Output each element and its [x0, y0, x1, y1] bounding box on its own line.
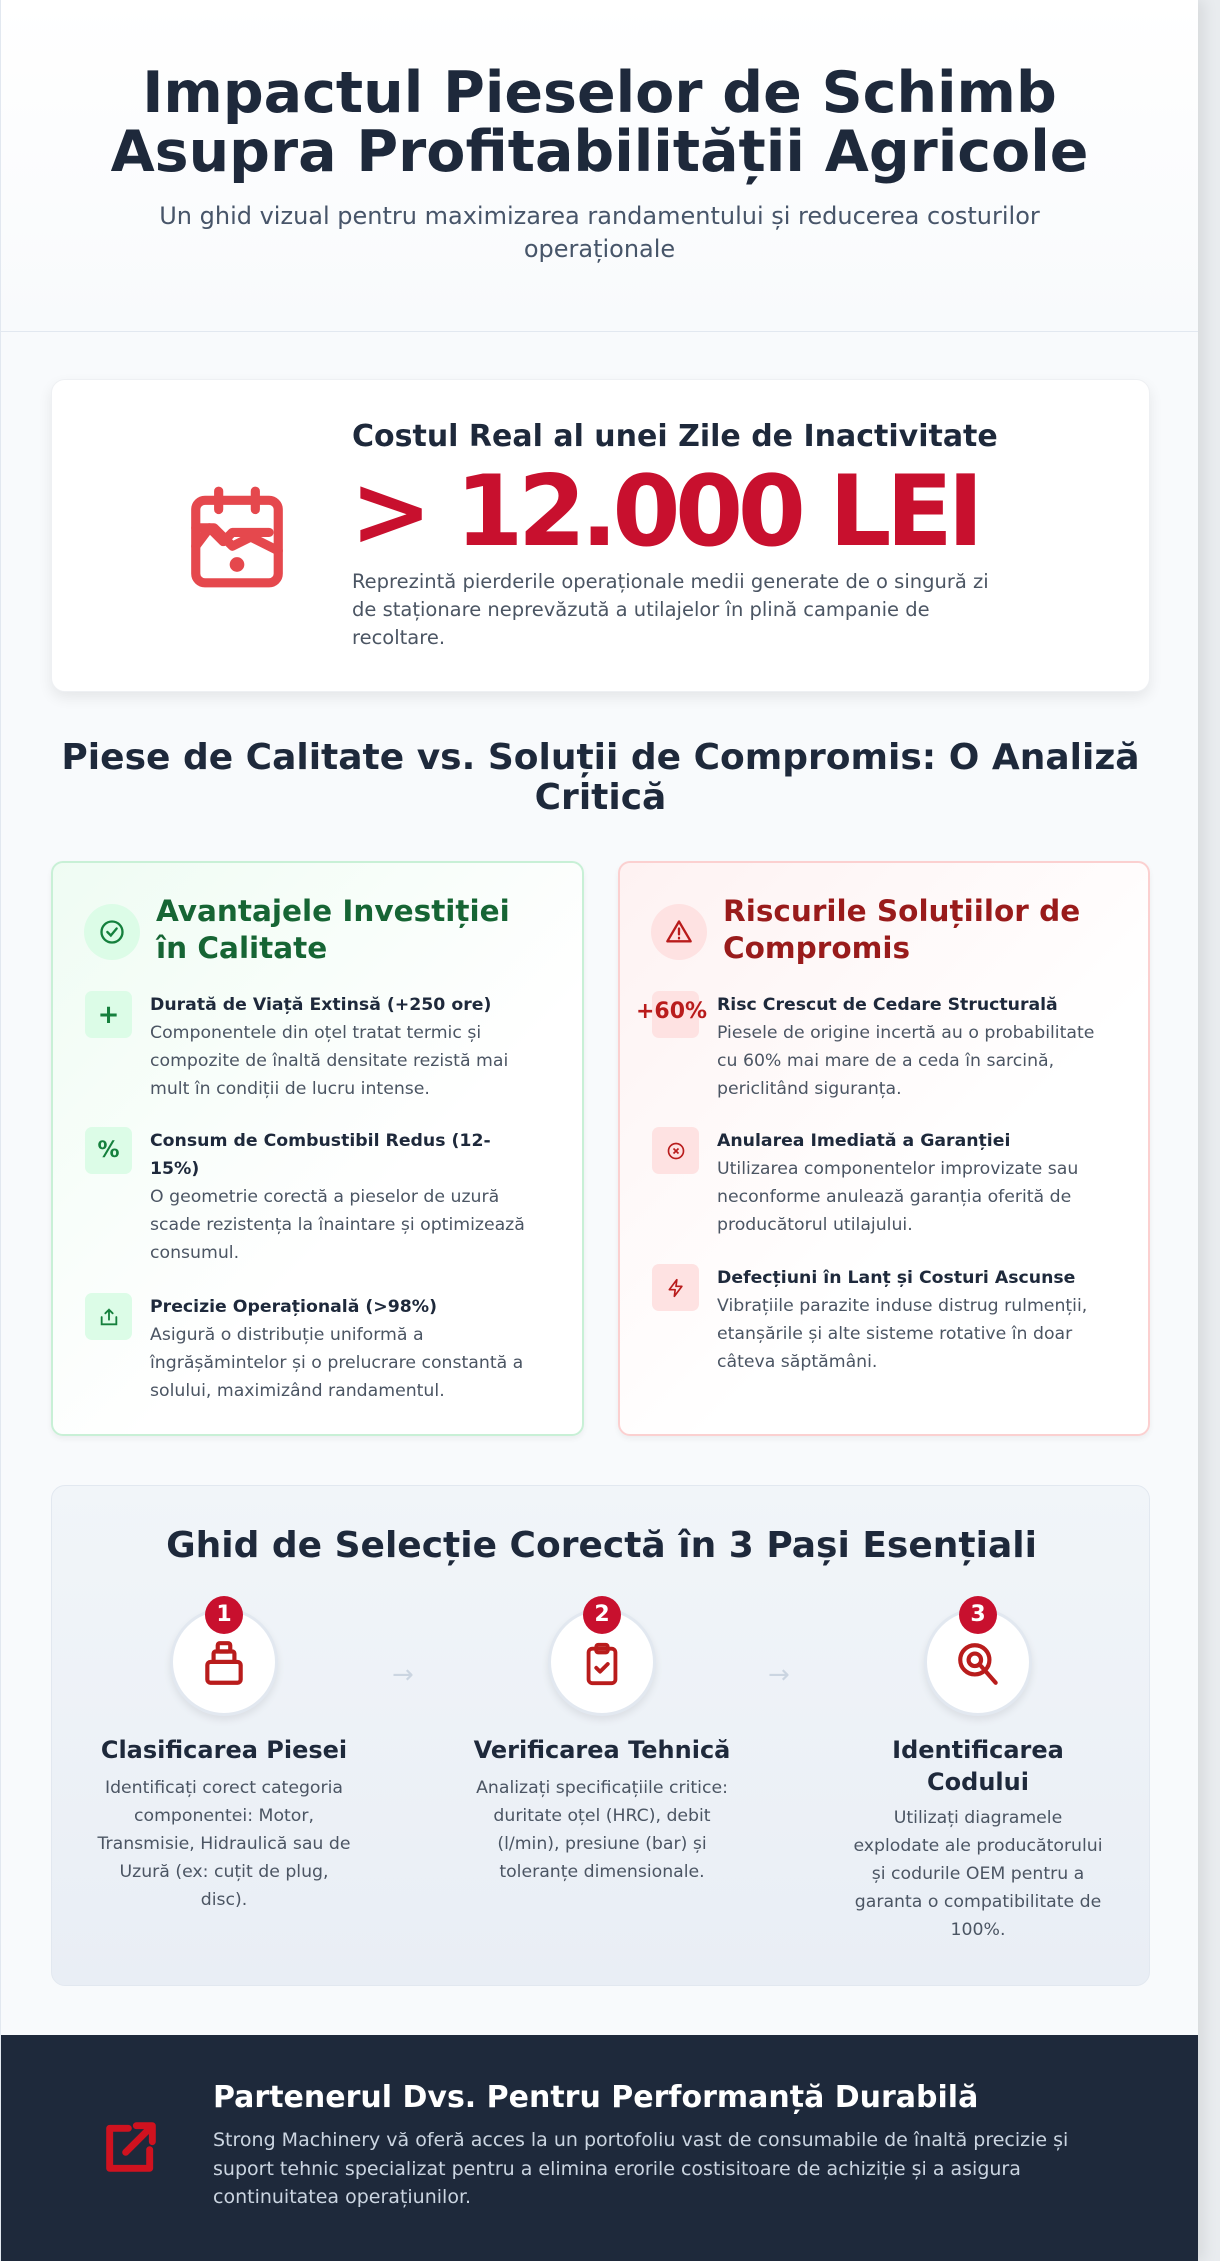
panel: risks: +60%	[636, 999, 707, 1024]
step 1	[97, 1596, 350, 1910]
panel: risks: Piesele de origine incertă au o probabilitate cu 60% mai mare de a ceda în sarcină, periclitând siguranța.	[717, 1023, 1094, 1099]
panel: advantages: O geometrie corectă a pieselor de uzură scade rezistența la înaintare și optimizează consumul.	[150, 1187, 525, 1263]
panel: 3-step guide: Clasificarea Piesei	[101, 1736, 347, 1764]
panel: 3-step guide: 3	[970, 1602, 986, 1627]
panel title: Avantajele Investiției	[156, 894, 510, 928]
panel title: Compromis	[723, 931, 910, 965]
item: precision	[85, 1293, 523, 1401]
icon: warning	[651, 904, 707, 960]
footer title: Partenerul Dvs. Pentru Performanță Durabilă	[213, 2080, 978, 2115]
panel: 3-step guide: Analizați specificațiile critice: duritate oțel (HRC), debit (l/min), presiune (bar) și toleranțe dimensionale.	[476, 1778, 728, 1882]
footer	[1, 2035, 1198, 2261]
section heading: Piese de Calitate vs. Soluții de Compromis: O Analiză Critică	[61, 737, 1140, 818]
title: Impactul Pieselor de Schimb	[142, 60, 1057, 126]
header	[1, 0, 1198, 332]
panel: 3-step guide: Identificarea Codului	[892, 1736, 1064, 1796]
panel: advantages: Asigură o distribuție uniformă a îngrășămintelor și o prelucrare constantă a solului, maximizând randamentul.	[150, 1325, 523, 1401]
panel: 3-step guide: Verificarea Tehnică	[474, 1736, 730, 1764]
icon: check circle	[84, 904, 140, 960]
heading: Costul Real al unei Zile de Inactivitate	[352, 419, 998, 454]
guide title: Ghid de Selecție Corectă în 3 Pași Esențiali	[166, 1525, 1037, 1566]
arrow: →	[392, 1660, 414, 1690]
panel: risks: Defecțiuni în Lanț și Costuri Ascunse	[717, 1268, 1075, 1288]
panel: 3-step guide: 2	[594, 1602, 610, 1627]
panel: advantages: Durată de Viață Extinsă (+250 ore)	[150, 995, 491, 1015]
description: Reprezintă pierderile operaționale medii generate de o singură zi de staționare neprevăzută a utilajelor în plină campanie de recoltare.	[352, 570, 989, 649]
icon: external link	[106, 2122, 156, 2172]
item: chain failures	[652, 1264, 1087, 1372]
panel: advantages: Precizie Operațională (>98%)	[150, 1297, 437, 1317]
item: fuel	[85, 1127, 525, 1263]
icon: calendar	[191, 486, 283, 588]
panel: advantages	[51, 861, 584, 1436]
panel title	[723, 894, 1080, 965]
item: warranty	[652, 1127, 1078, 1235]
item: lifetime	[85, 991, 508, 1099]
arrow: →	[768, 1660, 790, 1690]
panel: advantages: Componentele din oțel tratat termic și compozite de înaltă densitate rezistă mai mult în condiții de lucru intense.	[150, 1023, 508, 1099]
panel: 3-step guide: Utilizați diagramele explodate ale producătorului și codurile OEM pentru a garanta o compatibilitate de 100%.	[853, 1808, 1103, 1940]
step 3	[853, 1596, 1103, 1940]
item: failure	[636, 991, 1094, 1099]
panel: risks: Vibrațiile parazite induse distrug rulmenții, etanșările și alte sisteme rotative în doar câteva săptămâni.	[717, 1296, 1087, 1372]
panel: risks: Anularea Imediată a Garanției	[717, 1131, 1010, 1151]
panel: 3-step guide: Identificați corect categoria componentei: Motor, Transmisie, Hidraulică sau de Uzură (ex: cuțit de plug, disc).	[98, 1778, 350, 1910]
panel: 3-step guide: 1	[216, 1602, 232, 1627]
panel: advantages: +	[98, 1000, 119, 1030]
panel: risks: Utilizarea componentelor improvizate sau neconforme anulează garanția oferită de producătorul utilajului.	[717, 1159, 1078, 1235]
panel: risks: Risc Crescut de Cedare Structurală	[717, 995, 1058, 1015]
panel title: Riscurile Soluțiilor de	[723, 894, 1080, 928]
panel: risks	[618, 861, 1150, 1436]
subtitle: Un ghid vizual pentru maximizarea randamentului și reducerea costurilor operaționale	[159, 202, 1040, 263]
panel: 3-step guide	[51, 1485, 1150, 1986]
card: downtime cost	[51, 379, 1150, 692]
panel: advantages: %	[97, 1138, 120, 1163]
big number: > 12.000 LEI	[350, 455, 978, 569]
title: Asupra Profitabilității Agricole	[111, 119, 1088, 185]
footer text: Strong Machinery vă oferă acces la un portofoliu vast de consumabile de înaltă precizie și suport tehnic specializat pentru a elimina erorile costisitoare de achiziție și a asigura continuitatea operațiunilor.	[213, 2129, 1068, 2208]
title	[111, 60, 1088, 185]
step 2	[474, 1596, 730, 1882]
panel title: în Calitate	[156, 931, 327, 965]
panel: advantages: Consum de Combustibil Redus (12-15%)	[150, 1131, 491, 1179]
panel title	[156, 894, 510, 965]
